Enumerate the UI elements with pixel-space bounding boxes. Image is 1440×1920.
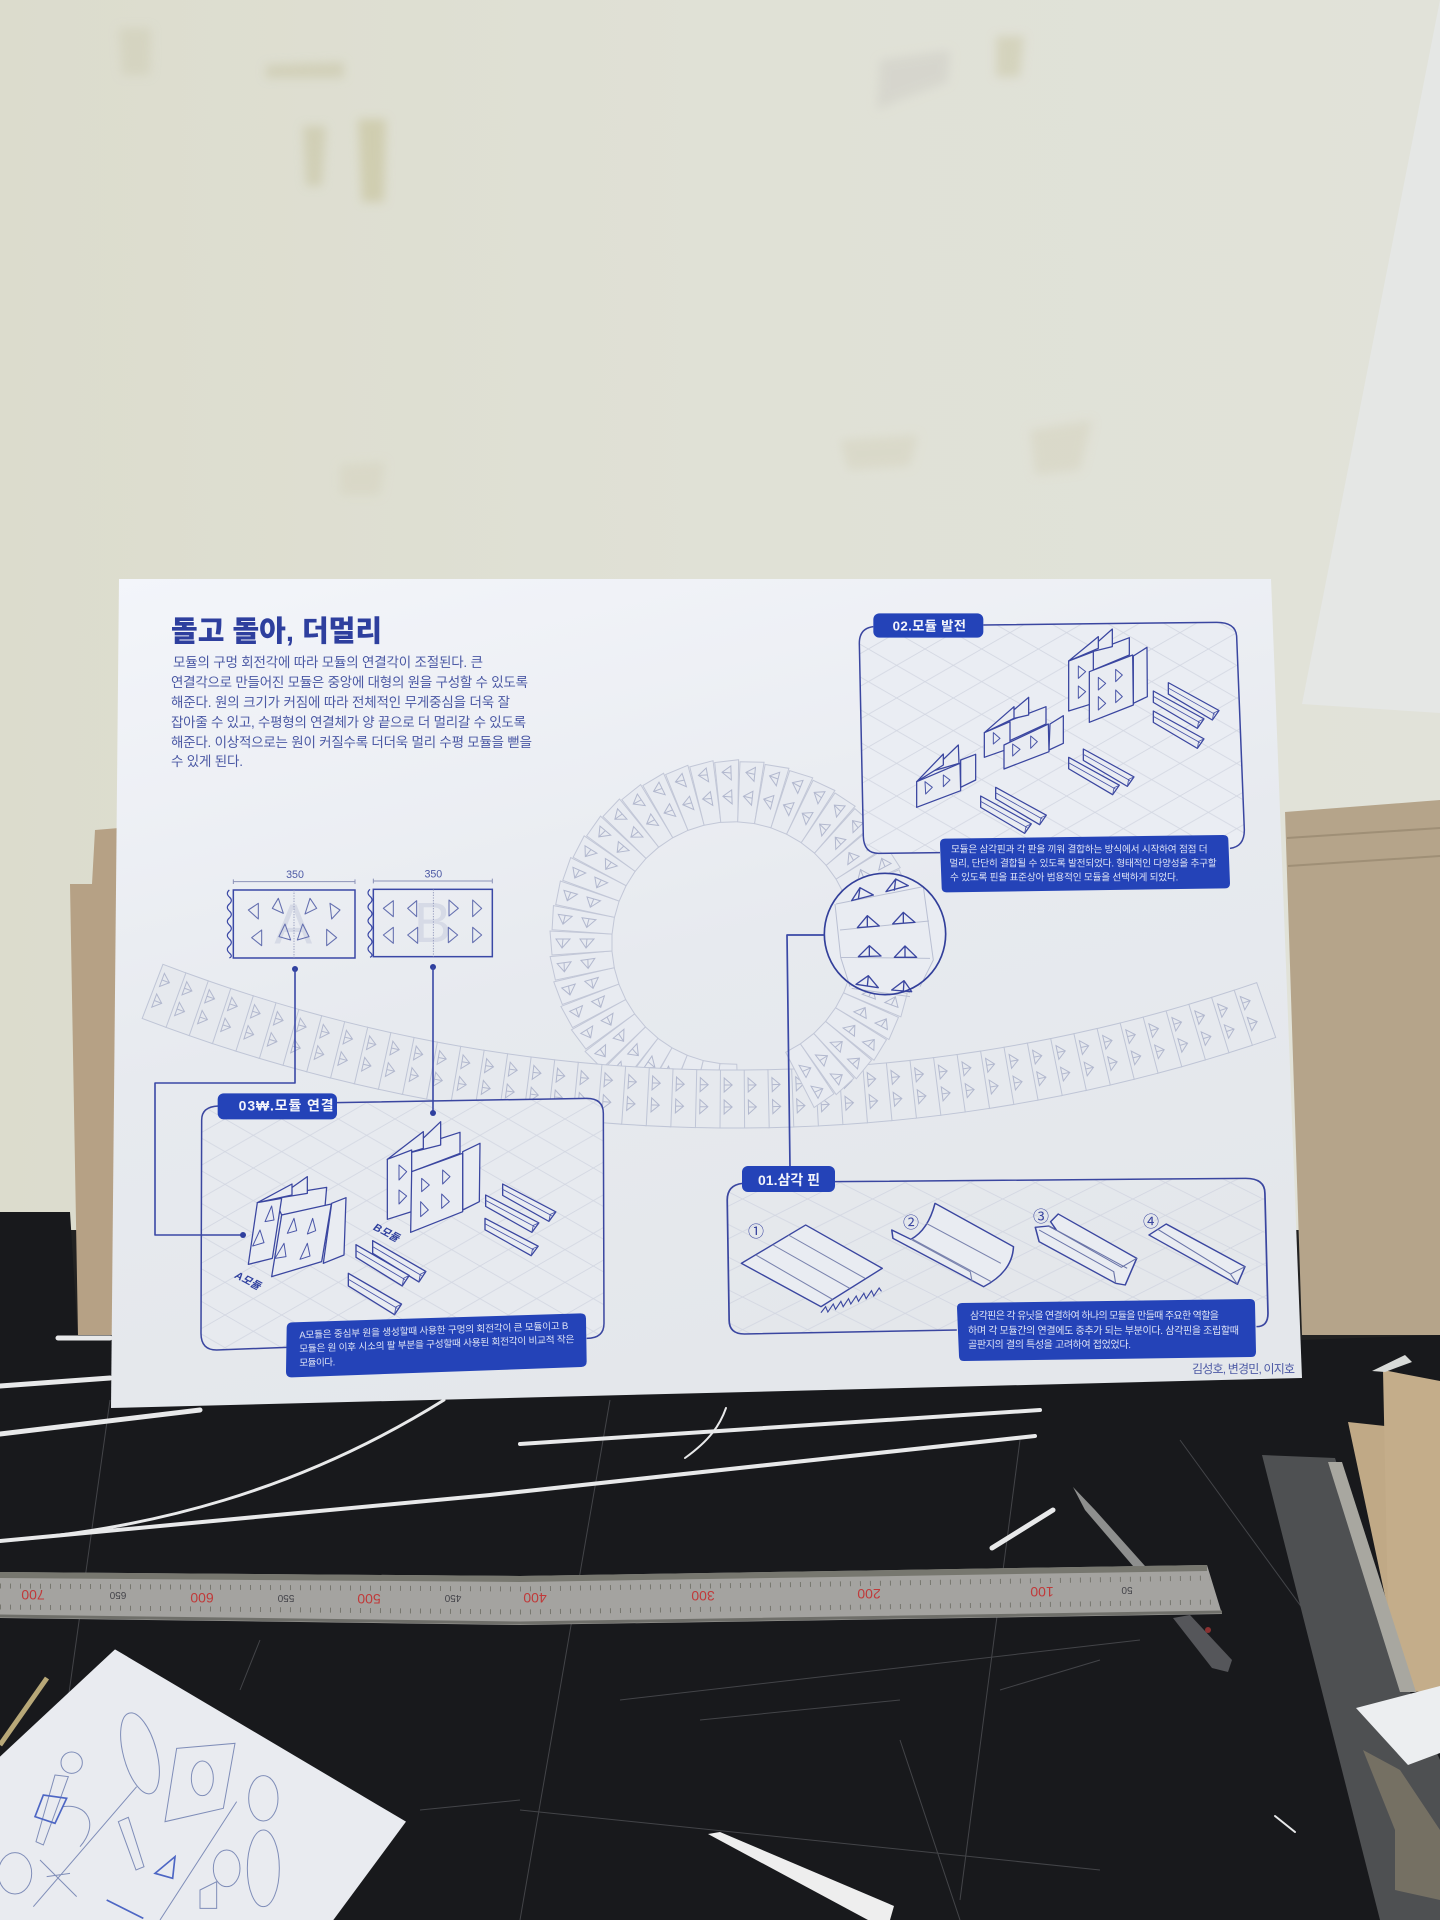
heading pill 02 <box>873 613 983 638</box>
connector B to booklet B <box>430 964 436 1116</box>
module B: B <box>414 892 452 955</box>
steel ruler: 550 <box>277 1592 294 1603</box>
intro text block: 잡아줄 수 있고, 수평형의 연결체가 양 끝으로 더 멀리갈 수 있도록 <box>171 715 526 730</box>
white card right <box>1356 1686 1440 1765</box>
intro text block: 해준다. 원의 크기가 커짐에 따라 전체적인 무게중심을 더욱 잘 <box>171 695 510 710</box>
triangle pins large <box>1153 683 1219 748</box>
dimension A: 350 <box>286 869 304 881</box>
caption 02: 멀리, 단단히 결합될 수 있도록 발전되었다. 형태적인 다양성을 추구할 <box>949 858 1217 870</box>
steel ruler: 100 <box>1030 1584 1054 1600</box>
connector A to booklet A <box>155 966 298 1238</box>
steel ruler: 500 <box>357 1591 381 1607</box>
grid pattern <box>201 1098 604 1350</box>
intro text block <box>171 655 532 769</box>
label B: B모듈 <box>371 1221 402 1245</box>
cardboard stack right <box>1285 800 1440 1335</box>
caption 02: 수 있도록 핀을 표준상아 범용적인 모듈을 선택하게 되었다. <box>950 872 1178 884</box>
poster sheet <box>111 579 1302 1408</box>
magnifier lens <box>824 873 946 997</box>
heading pill 01 <box>742 1166 835 1192</box>
translucent ruler <box>1262 1455 1440 1920</box>
caption 01: 골판지의 결의 특성을 고려하여 접었었다. <box>968 1338 1131 1351</box>
booklet B <box>387 1122 480 1232</box>
step numbers: ④ <box>1143 1213 1159 1231</box>
caption 03: 모듈이다. <box>299 1357 335 1369</box>
steel ruler: 450 <box>444 1592 461 1603</box>
curved module ring <box>550 760 916 1126</box>
panel 01: triangle pin <box>727 1166 1268 1361</box>
white board at upper right <box>1302 0 1440 713</box>
grid background <box>859 622 1244 853</box>
booklet small <box>917 745 976 807</box>
credits: 김성호, 변경민, 이지호 <box>1192 1362 1295 1376</box>
intro text block: 모듈의 구멍 회전각에 따라 모듈의 연결각이 조절된다. 큰 <box>173 655 483 670</box>
module B <box>368 889 492 957</box>
ring segments overlapping the strip <box>783 973 909 1107</box>
step numbers <box>748 1208 1159 1241</box>
table scratches <box>40 1400 1340 1920</box>
craft knife <box>1073 1487 1232 1672</box>
table <box>0 1212 1440 1920</box>
photo background: wall <box>0 0 1440 1230</box>
booklet medium <box>984 697 1063 769</box>
triangle pins medium <box>1069 749 1134 795</box>
heading pill 01: 01.삼각 핀 <box>758 1172 820 1188</box>
grid pattern <box>859 622 1244 853</box>
label A: A모듈 <box>232 1269 263 1293</box>
triangle pins A <box>348 1241 426 1315</box>
caption 02 <box>940 835 1230 892</box>
step 4 finished pin <box>1149 1224 1245 1284</box>
step 2 folded <box>892 1203 1013 1287</box>
step 3 folded <box>1035 1214 1137 1285</box>
intro text block: 수 있게 된다. <box>171 754 243 769</box>
triangle pins small <box>981 787 1046 833</box>
title: 돌고 돌아, 더멀리 <box>171 615 382 648</box>
booklet A <box>248 1177 346 1277</box>
steel ruler <box>0 1565 1222 1625</box>
dimension B: 350 <box>424 869 442 881</box>
grid background <box>201 1098 604 1350</box>
panel frame <box>201 1098 604 1350</box>
steel ruler: 50 <box>1121 1584 1133 1595</box>
module A and B plans <box>227 869 492 958</box>
steel ruler: 700 <box>21 1587 45 1603</box>
long curved module strip <box>139 944 1278 1148</box>
panel 02: module development <box>859 613 1244 892</box>
dimension B <box>373 869 492 883</box>
heading pill 03: 03₩.모듈 연결 <box>239 1098 334 1114</box>
heading pill 03 <box>218 1093 337 1119</box>
wall stains <box>119 28 1092 495</box>
caption 02: 모듈은 삼각핀과 각 판을 끼워 결합하는 방식에서 시작하여 점점 더 <box>951 844 1208 856</box>
caption 01 <box>957 1299 1256 1361</box>
stick <box>0 1678 47 1745</box>
cardboard on the table right <box>1348 1370 1440 1692</box>
caption 03: 모듈은 원 이후 시소의 팔 부분을 구성할때 사용된 회전각이 비교적 작은 <box>299 1333 575 1355</box>
heading pill 02: 02.모듈 발전 <box>893 619 966 634</box>
intro text block: 해준다. 이상적으로는 원이 커질수록 더더욱 멀리 수평 모듈을 뻗을 <box>171 735 532 750</box>
connector lens to panel 01 <box>787 935 824 1168</box>
caption 03: A모듈은 중심부 원을 생성할때 사용한 구멍의 회전각이 큰 모듈이고 B <box>299 1320 569 1341</box>
module A: A <box>274 893 312 956</box>
sketch paper <box>0 1649 406 1920</box>
caption 01: 삼각핀은 각 유닛을 연결하여 하나의 모듈을 만들때 주요한 역할을 <box>970 1309 1219 1322</box>
step numbers: ① <box>748 1223 764 1241</box>
steel ruler: 650 <box>109 1589 126 1600</box>
white strip on table bottom <box>708 1832 894 1920</box>
cardboard stack left <box>70 828 119 1335</box>
intro text block: 연결각으로 만들어진 모듈은 중앙에 대형의 원을 구성할 수 있도록 <box>171 675 528 690</box>
tape scrap <box>1372 1355 1412 1372</box>
sketches and frame <box>727 1178 1268 1334</box>
step numbers: ② <box>903 1214 919 1232</box>
dimension A <box>233 869 355 884</box>
caption 01: 하며 각 모듈간의 연결에도 중추가 되는 부분이다. 삼각핀을 조립할때 <box>968 1324 1239 1337</box>
step 1 sheet <box>741 1225 882 1313</box>
booklet large <box>1069 629 1147 722</box>
steel ruler: 600 <box>190 1590 214 1606</box>
steel ruler: 200 <box>857 1586 881 1602</box>
triangle pins B <box>485 1184 556 1256</box>
steel ruler: 300 <box>691 1588 715 1604</box>
panel frame <box>859 622 1244 853</box>
module A <box>227 890 355 958</box>
white paper strips <box>0 1338 1295 1832</box>
steel ruler: 400 <box>523 1590 547 1606</box>
step numbers: ③ <box>1033 1208 1049 1226</box>
caption 03 <box>286 1313 587 1377</box>
panel 03: module connection <box>201 1093 604 1377</box>
